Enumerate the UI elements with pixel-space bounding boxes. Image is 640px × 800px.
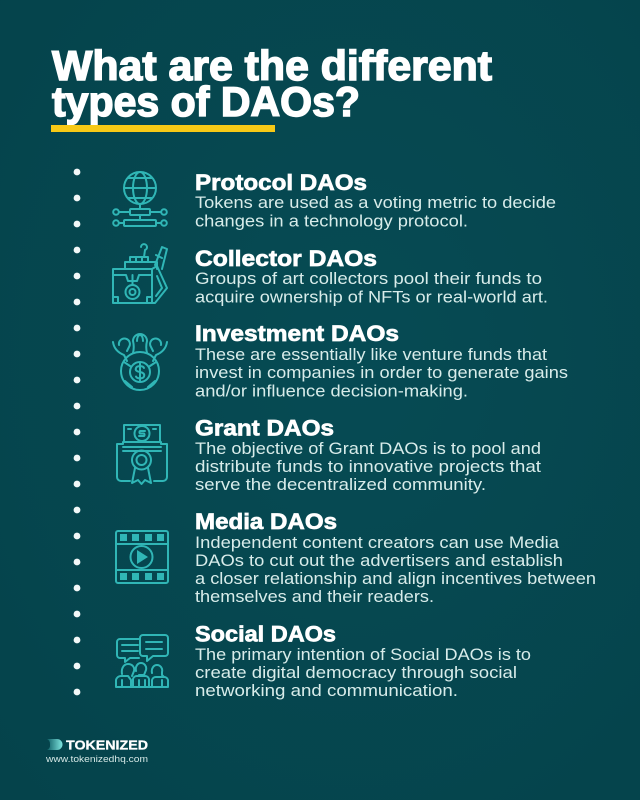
icon: collector briefcase <box>113 244 167 303</box>
title: types of DAOs? <box>52 78 360 125</box>
panel: investment DAOs <box>195 321 568 400</box>
footer logo and URL <box>45 738 148 765</box>
icon: globe network <box>113 172 167 226</box>
panel: media DAOs: Independent content creators can use Media <box>195 534 560 552</box>
icon: investment coin with people <box>113 334 167 390</box>
panel: social DAOs: networking and communication. <box>195 682 458 700</box>
icon: people talking <box>116 635 168 687</box>
title <box>52 42 492 125</box>
panel: protocol DAOs <box>195 170 556 230</box>
panel: social DAOs: The primary intention of Social DAOs is to <box>195 646 531 664</box>
panel: protocol DAOs: changes in a technology protocol. <box>195 212 468 230</box>
panel: media DAOs: a closer relationship and align incentives between <box>195 570 596 588</box>
panel: collector DAOs: Collector DAOs <box>195 246 377 271</box>
panel: collector DAOs: Groups of art collectors pool their funds to <box>195 270 542 288</box>
title: What are the different <box>52 42 492 89</box>
panel: protocol DAOs: Protocol DAOs <box>195 170 367 195</box>
title underline <box>51 125 275 132</box>
footer logo and URL: www.tokenizedhq.com <box>45 754 148 765</box>
panel: social DAOs: Social DAOs <box>195 622 336 646</box>
panel: collector DAOs <box>195 246 548 306</box>
panel: social DAOs: create digital democracy through social <box>195 664 517 682</box>
footer logo and URL: TOKENIZED <box>66 738 148 752</box>
icon: grant banknote and award <box>117 425 167 484</box>
icon: film strip with play button <box>116 531 168 583</box>
panel: media DAOs: DAOs to cut out the advertisers and establish <box>195 552 563 570</box>
panel: media DAOs: Media DAOs <box>195 509 337 534</box>
panel: grant DAOs: The objective of Grant DAOs is to pool and <box>195 440 541 458</box>
panel: investment DAOs: Investment DAOs <box>195 321 399 346</box>
panel: grant DAOs <box>195 416 541 494</box>
panel: media DAOs <box>195 509 596 606</box>
panel: collector DAOs: acquire ownership of NFTs or real-world art. <box>195 288 548 306</box>
panel: grant DAOs: serve the decentralized community. <box>195 476 486 494</box>
panel: investment DAOs: invest in companies in order to generate gains <box>195 364 568 382</box>
panel: grant DAOs: distribute funds to innovative projects that <box>195 458 541 476</box>
panel: social DAOs <box>195 622 531 700</box>
icon: logo mark <box>47 739 63 750</box>
panel: media DAOs: themselves and their readers. <box>195 588 434 606</box>
panel: investment DAOs: These are essentially like venture funds that <box>195 346 547 364</box>
panel: investment DAOs: and/or influence decision-making. <box>195 382 468 400</box>
panel: grant DAOs: Grant DAOs <box>195 416 334 440</box>
dotted vertical line <box>74 169 80 695</box>
panel: protocol DAOs: Tokens are used as a voting metric to decide <box>195 194 556 212</box>
